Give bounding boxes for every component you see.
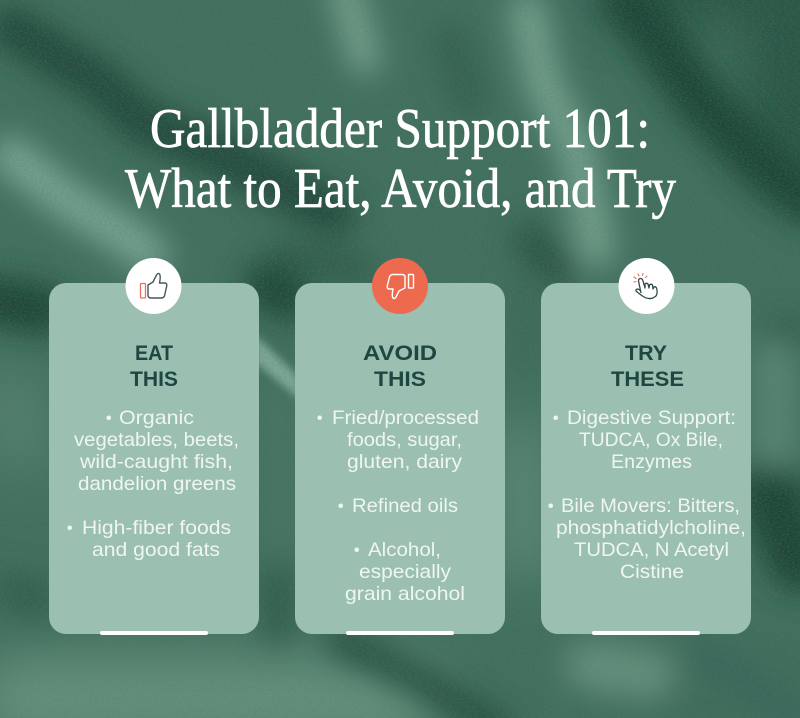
list: eat this items: dandelion greens (78, 473, 236, 495)
icon: thumbs up (126, 258, 182, 314)
list: try these items: TUDCA, Ox Bile, (579, 429, 723, 451)
list: eat this items: wild-caught fish, (79, 451, 233, 473)
icon: thumbs down (372, 258, 428, 314)
heading: avoid this (363, 341, 437, 391)
list: avoid this items: • (338, 496, 344, 516)
panel: try these (541, 258, 751, 635)
list: eat this items: High-fiber foods (82, 517, 231, 539)
list: eat this items: and good fats (92, 539, 220, 561)
heading: avoid this: AVOID (363, 341, 437, 365)
list: try these items: Enzymes (611, 451, 692, 473)
list: eat this items: vegetables, beets, (74, 429, 239, 451)
heading: avoid this: THIS (374, 367, 426, 391)
list: eat this items: Organic (119, 407, 194, 429)
list: try these items: • (553, 408, 559, 428)
panel: eat this (49, 258, 259, 635)
heading: try these (611, 341, 684, 391)
list: try these items (548, 407, 746, 583)
home bar (346, 631, 454, 635)
list: try these items: Bile Movers: Bitters, (561, 495, 740, 517)
list: avoid this items: especially (359, 561, 451, 583)
heading: eat this: EAT (135, 341, 173, 365)
title: Gallbladder Support 101: (150, 98, 650, 160)
list: try these items: TUDCA, N Acetyl (574, 539, 729, 561)
heading: eat this: THIS (130, 367, 178, 391)
list: avoid this items: Fried/processed (332, 407, 479, 429)
list: avoid this items: gluten, dairy (347, 451, 462, 473)
heading: eat this (130, 341, 178, 391)
home bar (100, 631, 208, 635)
list: avoid this items: • (354, 540, 360, 560)
list: avoid this items: Refined oils (352, 495, 458, 517)
list: try these items: • (548, 496, 554, 516)
home bar (592, 631, 700, 635)
list: try these items: Digestive Support: (567, 407, 736, 429)
list: eat this items: • (67, 518, 73, 538)
list: try these items: Cistine (620, 561, 684, 583)
panel: avoid this (295, 258, 505, 635)
list: eat this items (67, 407, 239, 561)
list: avoid this items: Alcohol, (368, 539, 441, 561)
list: avoid this items: grain alcohol (345, 583, 465, 605)
heading: try these: THESE (611, 367, 684, 391)
list: try these items: phosphatidylcholine, (556, 517, 746, 539)
heading: try these: TRY (625, 341, 667, 365)
list: eat this items: • (106, 408, 112, 428)
title (125, 98, 676, 220)
list: avoid this items (317, 407, 479, 605)
list: avoid this items: foods, sugar, (347, 429, 462, 451)
icon: pointing hand (618, 258, 674, 314)
list: avoid this items: • (317, 408, 323, 428)
title: What to Eat, Avoid, and Try (125, 158, 676, 220)
